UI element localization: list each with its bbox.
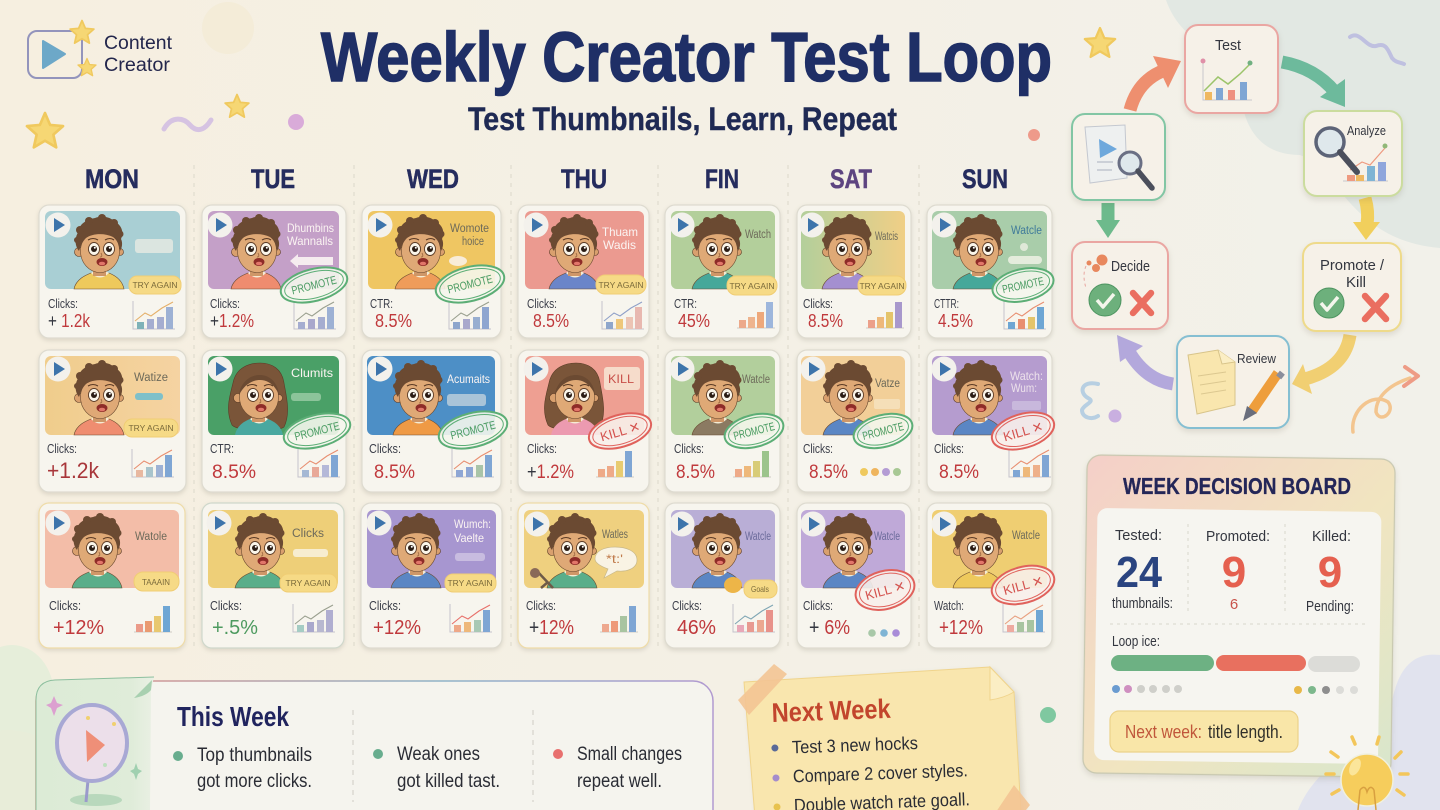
weekday headers: WED — [407, 164, 459, 194]
card: Thursday row 2 — [518, 350, 655, 492]
card: Wednesday row 1: hoice — [462, 236, 484, 248]
card: Friday row 2: PROMOTE — [732, 421, 776, 443]
point: top thumbnails — [173, 745, 312, 792]
card: Thursday row 2: Clicks: — [527, 442, 557, 456]
stat: tested — [1112, 527, 1173, 612]
step: Analyze: Analyze — [1347, 124, 1386, 138]
card: Tuesday row 2: 8.5% — [212, 461, 256, 483]
card: Saturday row 3: + 6% — [809, 617, 850, 639]
card: Tuesday row 3: Clicks — [292, 528, 324, 540]
heading: Next Week — [771, 694, 892, 728]
card: Friday row 2 — [665, 350, 787, 492]
card: Tuesday row 1: PROMOTE — [290, 275, 338, 297]
card: Monday row 1: Clicks: — [48, 297, 78, 311]
card: Wednesday row 2: PROMOTE — [449, 420, 497, 442]
step: source video — [1072, 114, 1165, 200]
point: weak ones: got killed tast. — [397, 771, 500, 792]
card: Saturday row 2 — [797, 350, 916, 492]
card: Friday row 3: 46% — [677, 617, 716, 639]
card: Friday row 1: CTR: — [674, 297, 697, 311]
step: Promote / Kill — [1303, 243, 1401, 331]
card: Saturday row 1: 8.5% — [808, 311, 843, 331]
card: Thursday row 3: +12% — [529, 617, 574, 639]
card: Monday row 3: Clicks: — [49, 599, 81, 613]
card: Monday row 3 — [39, 503, 185, 648]
column dividers — [194, 165, 919, 650]
stat: promoted — [1206, 528, 1270, 613]
next week callout: title length. — [1208, 722, 1283, 742]
card: Saturday row 2: PROMOTE — [861, 421, 905, 443]
card: Monday row 1: + 1.2k — [48, 311, 91, 331]
board title: WEEK DECISION BOARD — [1123, 473, 1351, 499]
card: Saturday row 3 — [797, 503, 919, 648]
card: Tuesday row 3: Clicks: — [210, 599, 242, 613]
card: Monday row 3: +12% — [53, 617, 104, 639]
weekday headers: THU — [561, 164, 607, 194]
card: Friday row 1: TRY AGAIN — [729, 281, 775, 291]
point: small changes: repeat well. — [577, 771, 662, 792]
card: Saturday row 3: KILL ✕ — [863, 578, 907, 603]
card: Sunday row 2: Wum: — [1011, 381, 1037, 395]
card: Sunday row 2 — [927, 350, 1058, 492]
card: Friday row 1 — [665, 205, 780, 338]
card: Wednesday row 1: CTR: — [370, 297, 393, 311]
card: Monday row 2: Watize — [134, 372, 168, 384]
card: Saturday row 3: Watcle — [874, 531, 900, 543]
logo: Content Creator — [28, 20, 173, 78]
title: Weekly Creator Test Loop — [321, 18, 1052, 96]
card: Tuesday row 1: +1.2% — [210, 311, 254, 331]
left icon strip — [36, 677, 154, 810]
card: Tuesday row 1: Wannalls — [287, 234, 333, 248]
card: Wednesday row 3: Wumch: — [454, 517, 491, 531]
heading: This Week — [177, 701, 289, 732]
weekday headers: TUE — [251, 164, 295, 194]
card: Tuesday row 2: Clumits — [291, 366, 333, 380]
card: Wednesday row 3: Vaelte — [454, 531, 484, 545]
card: Saturday row 1 — [797, 205, 911, 338]
card: Tuesday row 3 — [202, 503, 344, 648]
card: Monday row 1 — [39, 205, 186, 338]
stat: promoted: 6 — [1230, 596, 1238, 613]
card: Tuesday row 3: +.5% — [212, 617, 258, 639]
card: Monday row 3: TAAAIN — [142, 577, 170, 587]
card: Wednesday row 2 — [362, 350, 511, 492]
point: weak ones — [373, 744, 500, 792]
step: Analyze — [1304, 111, 1402, 196]
card: Tuesday row 2: CTR: — [210, 442, 234, 456]
card: Thursday row 1: 8.5% — [533, 311, 569, 331]
next week callout: Next week: — [1125, 722, 1202, 742]
stat: promoted: 9 — [1222, 548, 1246, 597]
card: Wednesday row 1: PROMOTE — [446, 274, 494, 296]
card: Sunday row 2: KILL ✕ — [1001, 419, 1045, 444]
card: Tuesday row 1: Dhumbins — [287, 221, 334, 235]
card: Wednesday row 2: Acumaits — [447, 372, 490, 386]
card: Sunday row 1: PROMOTE — [1001, 276, 1045, 296]
arrow: source to test — [1130, 56, 1181, 110]
step: Decide — [1072, 242, 1168, 329]
stat: killed: 9 — [1318, 548, 1342, 597]
arrow: review to decide — [1117, 335, 1173, 384]
arrow: source to decide — [1096, 203, 1120, 238]
stat: tested: 24 — [1116, 548, 1162, 597]
card: Thursday row 3: Clicks: — [526, 599, 556, 613]
stat: killed: Pending: — [1306, 598, 1354, 615]
card: Tuesday row 3: TRY AGAIN — [285, 578, 331, 588]
tape — [738, 664, 787, 715]
card: Sunday row 3: KILL ✕ — [1001, 573, 1045, 598]
card: Sunday row 3: Watcle — [1012, 530, 1040, 542]
card: Wednesday row 1: Womote — [450, 223, 489, 235]
stat: killed: Killed: — [1312, 528, 1351, 545]
point: small changes — [553, 744, 682, 792]
card: Monday row 2: TRY AGAIN — [128, 423, 174, 433]
card: Saturday row 1: Clicks: — [803, 297, 833, 311]
weekday headers: MON — [85, 164, 139, 194]
panel: Week Decision Board — [1083, 455, 1395, 777]
card: Friday row 3: Goals — [751, 584, 769, 594]
card: Saturday row 2: Vatze — [875, 378, 900, 390]
card: Wednesday row 1: 8.5% — [375, 311, 412, 331]
card: Thursday row 3: Watles — [602, 529, 628, 541]
point: top thumbnails: Top thumbnails — [197, 745, 312, 766]
card: Sunday row 1: 4.5% — [938, 311, 973, 331]
card: Monday row 2: +1.2k — [47, 458, 100, 483]
card: Tuesday row 1: Clicks: — [210, 297, 240, 311]
weekday headers: SUN — [962, 164, 1008, 194]
card: Tuesday row 2 — [202, 350, 354, 492]
step: Test: Test — [1215, 38, 1241, 54]
card: Thursday row 3: *t:' — [606, 552, 623, 566]
card: Wednesday row 3: Clicks: — [369, 599, 401, 613]
card: Thursday row 3 — [518, 503, 649, 648]
card: Thursday row 1: TRY AGAIN — [598, 280, 644, 290]
card: Thursday row 2: +1.2% — [527, 461, 574, 483]
card: Friday row 2: 8.5% — [676, 461, 715, 483]
card: Thursday row 1: Clicks: — [527, 297, 557, 311]
loop progress: Loop ice: — [1112, 633, 1160, 650]
point: small changes: Small changes — [577, 744, 682, 765]
step: Promote / Kill: Kill — [1346, 275, 1366, 291]
card: Monday row 3: Watole — [135, 531, 167, 543]
card: Monday row 2 — [39, 350, 186, 492]
card: Friday row 1: Watch — [745, 229, 771, 241]
stat: killed — [1306, 528, 1354, 615]
weekday headers: FIN — [705, 164, 739, 194]
card: Saturday row 2: 8.5% — [809, 461, 848, 483]
card: Sunday row 3: Watch: — [934, 599, 964, 613]
card: Friday row 2: Watcle — [742, 374, 770, 386]
flow arrows — [1096, 56, 1380, 394]
card: Sunday row 2: Clicks: — [934, 442, 964, 456]
next week callout — [1110, 711, 1298, 752]
card: Friday row 3: Watcle — [745, 531, 771, 543]
step: Promote / Kill: Promote / — [1320, 258, 1385, 274]
loop progress — [1111, 633, 1360, 694]
card: Thursday row 1: Wadis — [603, 238, 636, 252]
card: Saturday row 1: TRY AGAIN — [859, 281, 905, 291]
card: Sunday row 3: +12% — [939, 617, 983, 639]
card: Wednesday row 2: Clicks: — [369, 442, 401, 456]
panel: This Week — [36, 677, 713, 810]
arrow: promote to review — [1292, 335, 1350, 394]
card: Wednesday row 1 — [362, 205, 508, 338]
card: Wednesday row 3: TRY AGAIN — [447, 578, 493, 588]
subtitle: Test Thumbnails, Learn, Repeat — [468, 101, 897, 137]
stat: tested: thumbnails: — [1112, 595, 1173, 612]
card: Wednesday row 2: 8.5% — [374, 461, 415, 483]
card: Saturday row 2: Clicks: — [803, 442, 833, 456]
point: top thumbnails: got more clicks. — [197, 771, 312, 792]
next week list — [771, 731, 970, 810]
card: Sunday row 1: Watcle — [1011, 225, 1042, 237]
card: Friday row 2: Clicks: — [674, 442, 704, 456]
card: Thursday row 1: Thuam — [602, 225, 638, 239]
card: Saturday row 3: Clicks: — [803, 599, 833, 613]
weekday headers — [85, 164, 1008, 194]
card: Sunday row 1 — [927, 205, 1057, 338]
card: Thursday row 1 — [518, 205, 649, 338]
stat: tested: Tested: — [1115, 527, 1162, 544]
card: Friday row 3: Clicks: — [672, 599, 702, 613]
card: Sunday row 2: 8.5% — [939, 461, 979, 483]
card: Tuesday row 1 — [202, 205, 351, 338]
point: weak ones: Weak ones — [397, 744, 480, 765]
card: Sunday row 2: Watch: — [1010, 369, 1043, 383]
card: Friday row 3 — [665, 503, 780, 648]
card: Sunday row 3 — [927, 503, 1059, 648]
step: Review — [1177, 336, 1289, 428]
icon: light bulb — [1326, 737, 1408, 810]
card: Wednesday row 3: +12% — [373, 617, 421, 639]
stat: promoted: Promoted: — [1206, 528, 1270, 545]
step: Review: Review — [1237, 352, 1277, 366]
card: Saturday row 1: Watcis — [875, 231, 898, 243]
card: Monday row 2: Clicks: — [47, 442, 77, 456]
step: Test — [1185, 25, 1278, 113]
card: Tuesday row 2: PROMOTE — [293, 421, 341, 443]
card: Thursday row 2: KILL ✕ — [598, 419, 642, 444]
sticky note: Next Week — [738, 664, 1030, 810]
card: Monday row 1: TRY AGAIN — [132, 280, 178, 290]
weekday headers: SAT — [830, 164, 872, 194]
card: Thursday row 2: KILL — [608, 372, 634, 386]
card: Wednesday row 3 — [361, 503, 502, 648]
logo: Content Creator: Content — [104, 33, 173, 54]
next week list: Test 3 new hocks — [792, 733, 918, 757]
card: Sunday row 1: CTTR: — [934, 297, 959, 311]
logo: Content Creator: Creator — [104, 55, 171, 76]
card: Friday row 1: 45% — [678, 311, 710, 331]
arrow: test to analyze — [1282, 62, 1345, 107]
next week list: Compare 2 cover styles. — [793, 760, 968, 786]
arrow: analyze to promote — [1353, 198, 1380, 240]
step: Decide: Decide — [1111, 259, 1150, 275]
